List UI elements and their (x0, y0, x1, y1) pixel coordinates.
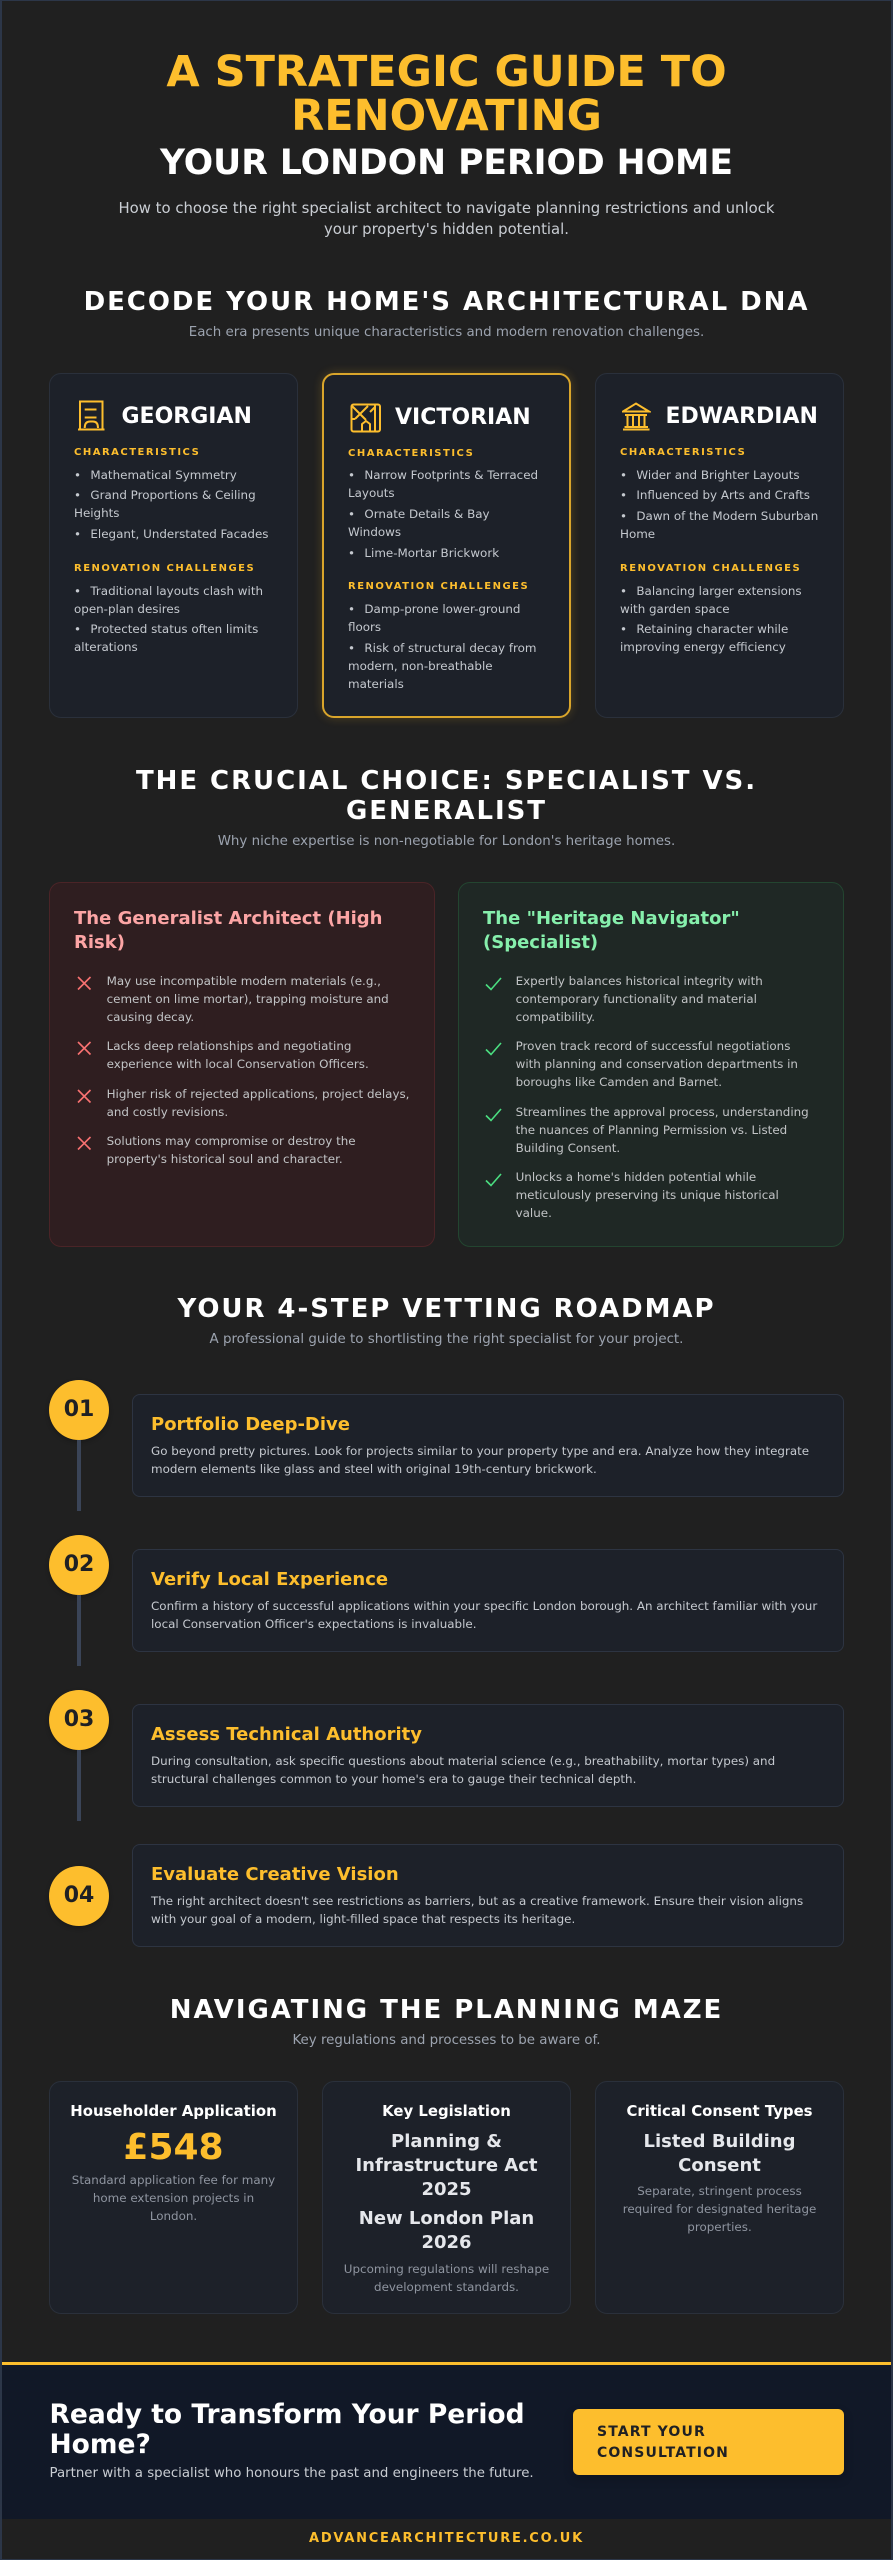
renovation challenges: with garden space (620, 602, 730, 616)
step title: Assess Technical Authority (151, 1724, 422, 1745)
characteristics: Wider and Brighter Layouts (636, 468, 800, 482)
renovation challenges (620, 563, 802, 654)
title: gold lines: A STRATEGIC GUIDE TO (166, 47, 727, 97)
header (118, 47, 774, 238)
heading subtitle: Each era presents unique characteristics and modern renovation challenges. (189, 325, 704, 340)
risk list: Higher risk of rejected applications, project delays, (107, 1087, 409, 1101)
renovation challenges: RENOVATION CHALLENGES (620, 563, 801, 574)
panel: Georgian (49, 373, 298, 718)
panel heading (74, 908, 382, 952)
era name: VICTORIAN (395, 404, 531, 430)
characteristics: Lime-Mortar Brickwork (364, 546, 499, 560)
step number 02 (49, 1535, 109, 1595)
fee description (72, 2173, 275, 2223)
panel: householder application (49, 2081, 298, 2314)
renovation challenges: open-plan desires (74, 602, 180, 616)
panel: generalist architect (49, 882, 435, 1247)
characteristics: Windows (348, 525, 401, 539)
characteristics: CHARACTERISTICS (74, 447, 200, 458)
title: gold lines (166, 47, 727, 141)
subtitle: How to choose the right specialist architect to navigate planning restrictions and unlock (118, 199, 774, 217)
step number 02: 02 (64, 1552, 94, 1577)
characteristics: Layouts (348, 486, 395, 500)
step description: Go beyond pretty pictures. Look for projects similar to your property type and era. Analyze how they integrate (151, 1444, 809, 1458)
card heading: Householder Application (70, 2102, 277, 2120)
icon: Georgian door (78, 400, 104, 430)
panel: Victorian (322, 373, 571, 718)
panel: Edwardian (595, 373, 844, 718)
benefit list: boroughs like Camden and Barnet. (516, 1075, 722, 1089)
step card (132, 1844, 844, 1947)
title: white line: YOUR LONDON PERIOD HOME (160, 143, 733, 183)
heading text: NAVIGATING THE PLANNING MAZE (170, 1995, 723, 2025)
panel: key legislation (322, 2081, 571, 2314)
characteristics: • (620, 509, 627, 523)
connector line (77, 1440, 81, 1511)
characteristics: CHARACTERISTICS (620, 447, 746, 458)
renovation challenges (348, 581, 537, 691)
step number 03: 03 (64, 1707, 94, 1732)
renovation challenges (74, 563, 263, 654)
era name: GEORGIAN (122, 404, 252, 428)
benefit list: contemporary functionality and material (516, 992, 757, 1006)
call to action band (2, 2362, 891, 2519)
connector line (77, 1750, 81, 1821)
heading subtitle: A professional guide to shortlisting the right specialist for your project. (210, 1332, 683, 1347)
heading text: THE CRUCIAL CHOICE: SPECIALIST VS. (136, 766, 757, 796)
renovation challenges: RENOVATION CHALLENGES (74, 563, 255, 574)
panel heading: (Specialist) (483, 932, 598, 952)
benefit list: Expertly balances historical integrity with (516, 974, 763, 988)
section heading: planning maze (170, 1995, 723, 2048)
characteristics: Dawn of the Modern Suburban (636, 509, 818, 523)
risk list: causing decay. (107, 1010, 194, 1024)
characteristics: Heights (74, 506, 120, 520)
step card (132, 1394, 844, 1497)
renovation challenges: floors (348, 620, 381, 634)
plan name: New London Plan (359, 2208, 534, 2229)
step number 01: 01 (64, 1397, 94, 1422)
benefit list: Streamlines the approval process, understanding (516, 1105, 809, 1119)
benefit list: the nuances of Planning Permission vs. Listed (516, 1123, 787, 1137)
characteristics: Grand Proportions & Ceiling (90, 488, 256, 502)
risk list: Solutions may compromise or destroy the (107, 1134, 356, 1148)
fee description: London. (150, 2209, 197, 2223)
step card (132, 1549, 844, 1652)
renovation challenges: improving energy efficiency (620, 640, 786, 654)
title: gold lines: RENOVATING (291, 91, 602, 141)
benefit list: compatibility. (516, 1010, 595, 1024)
characteristics (348, 448, 538, 560)
risk list: cement on lime mortar), trapping moisture and (107, 992, 389, 1006)
panel heading: Risk) (74, 932, 125, 952)
CTA subtext: Partner with a specialist who honours the past and engineers the future. (50, 2466, 534, 2481)
section heading: architectural DNA (84, 287, 809, 340)
renovation challenges: Protected status often limits (90, 622, 258, 636)
step number 03 (49, 1690, 109, 1750)
step 1 (49, 1380, 844, 1511)
risk list: property's historical soul and character. (107, 1152, 343, 1166)
act name (355, 2131, 538, 2200)
renovation challenges: • (620, 622, 627, 636)
characteristics: Narrow Footprints & Terraced (364, 468, 538, 482)
renovation challenges: • (74, 584, 81, 598)
characteristics: • (348, 507, 355, 521)
heading subtitle: Why niche expertise is non-negotiable for London's heritage homes. (218, 834, 675, 849)
step description (151, 1444, 809, 1476)
panel: heritage navigator specialist (458, 882, 844, 1247)
risk list (78, 974, 409, 1166)
risk list: experience with local Conservation Officers. (107, 1057, 369, 1071)
step card (132, 1704, 844, 1807)
CTA heading (50, 2399, 525, 2460)
fee description: home extension projects in (93, 2191, 254, 2205)
consent description (623, 2184, 816, 2234)
risk list: Lacks deep relationships and negotiating (107, 1039, 351, 1053)
characteristics: Ornate Details & Bay (364, 507, 490, 521)
step 4 (49, 1844, 844, 1947)
plan name: 2026 (421, 2232, 472, 2253)
characteristics: • (348, 468, 355, 482)
step title: Verify Local Experience (151, 1569, 388, 1590)
legislation description: Upcoming regulations will reshape (344, 2262, 549, 2276)
renovation challenges: alterations (74, 640, 138, 654)
renovation challenges: materials (348, 677, 404, 691)
renovation challenges: • (348, 602, 355, 616)
step description: with your goal of a modern, light-filled space that respects its heritage. (151, 1912, 575, 1926)
legislation description (344, 2262, 549, 2294)
fee description: Standard application fee for many (72, 2173, 275, 2187)
CTA heading: Ready to Transform Your Period (50, 2399, 525, 2430)
heading subtitle: Key regulations and processes to be aware of. (292, 2033, 601, 2048)
characteristics: CHARACTERISTICS (348, 448, 474, 459)
CTA button (573, 2409, 844, 2475)
renovation challenges: Traditional layouts clash with (90, 584, 263, 598)
characteristics (620, 447, 818, 541)
plan name (359, 2208, 534, 2253)
consent name (644, 2131, 795, 2176)
era name: EDWARDIAN (666, 404, 818, 428)
card heading: Critical Consent Types (626, 2102, 813, 2120)
characteristics: • (74, 527, 81, 541)
step description: structural challenges common to your home's era to gauge their technical depth. (151, 1772, 636, 1786)
characteristics: Elegant, Understated Facades (90, 527, 268, 541)
renovation challenges: • (74, 622, 81, 636)
benefit list (486, 974, 809, 1220)
renovation challenges: Balancing larger extensions (636, 584, 802, 598)
step 2 (49, 1535, 844, 1666)
benefit list: Building Consent. (516, 1141, 620, 1155)
step title: Portfolio Deep-Dive (151, 1414, 350, 1435)
consent description: Separate, stringent process (637, 2184, 802, 2198)
renovation challenges: Damp-prone lower-ground (364, 602, 520, 616)
panel heading (483, 908, 740, 952)
panel: critical consent types (595, 2081, 844, 2314)
renovation challenges: • (620, 584, 627, 598)
characteristics: • (348, 546, 355, 560)
characteristics: Home (620, 527, 655, 541)
heading text: GENERALIST (346, 796, 547, 826)
icon: Edwardian portico (622, 402, 651, 430)
act name: 2025 (421, 2179, 472, 2200)
step description: During consultation, ask specific questions about material science (e.g., breathability, mortar types) and (151, 1754, 775, 1768)
heading text (136, 766, 757, 826)
CTA button: START YOUR (597, 2424, 706, 2440)
benefit list: Proven track record of successful negotiations (516, 1039, 790, 1053)
step description: local Conservation Officer's expectations is invaluable. (151, 1617, 476, 1631)
benefit list: value. (516, 1206, 552, 1220)
step description: modern elements like glass and steel with original 19th-century brickwork. (151, 1462, 597, 1476)
renovation challenges: • (348, 641, 355, 655)
heading text: DECODE YOUR HOME'S ARCHITECTURAL DNA (84, 287, 809, 317)
consent name: Consent (678, 2155, 761, 2176)
consent description: properties. (687, 2220, 752, 2234)
step description: Confirm a history of successful applications within your specific London borough. An architect familiar with your (151, 1599, 817, 1613)
consent description: required for designated heritage (623, 2202, 816, 2216)
card heading: Key Legislation (382, 2102, 511, 2120)
characteristics (74, 447, 268, 541)
step description (151, 1754, 775, 1786)
renovation challenges: Retaining character while (636, 622, 788, 636)
panel heading: The "Heritage Navigator" (483, 908, 740, 928)
step number 04 (49, 1866, 109, 1926)
CTA heading: Home? (50, 2429, 151, 2460)
characteristics: Influenced by Arts and Crafts (636, 488, 810, 502)
legislation description: development standards. (374, 2280, 519, 2294)
step title: Evaluate Creative Vision (151, 1864, 399, 1885)
connector line (77, 1595, 81, 1666)
footer website: ADVANCEARCHITECTURE.CO.UK (309, 2531, 584, 2546)
consent name: Listed Building (644, 2131, 795, 2152)
panel heading: The Generalist Architect (High (74, 908, 382, 928)
step description (150, 1894, 803, 1926)
characteristics: • (620, 468, 627, 482)
renovation challenges: modern, non-breathable (348, 659, 493, 673)
icon: Victorian house window (350, 404, 381, 432)
step description (151, 1599, 818, 1631)
benefit list: with planning and conservation departments in (516, 1057, 798, 1071)
benefit list: meticulously preserving its unique historical (516, 1188, 779, 1202)
characteristics: • (74, 468, 81, 482)
benefit list: Unlocks a home's hidden potential while (516, 1170, 756, 1184)
fee stat: £548 (123, 2127, 224, 2168)
section heading: vetting roadmap (177, 1294, 716, 1347)
characteristics: Mathematical Symmetry (90, 468, 237, 482)
renovation challenges: RENOVATION CHALLENGES (348, 581, 529, 592)
subtitle (118, 199, 774, 238)
characteristics: • (620, 488, 627, 502)
risk list: and costly revisions. (107, 1105, 228, 1119)
renovation challenges: Risk of structural decay from (364, 641, 537, 655)
act name: Planning & (391, 2131, 502, 2152)
step number 01 (49, 1380, 109, 1440)
step 3 (49, 1690, 844, 1821)
heading text: YOUR 4-STEP VETTING ROADMAP (177, 1294, 716, 1324)
section heading: specialist vs generalist (136, 766, 757, 849)
risk list: May use incompatible modern materials (e.g., (107, 974, 381, 988)
subtitle: your property's hidden potential. (324, 220, 569, 238)
characteristics: • (74, 488, 81, 502)
act name: Infrastructure Act (355, 2155, 538, 2176)
step description: The right architect doesn't see restrictions as barriers, but as a creative framework. Ensure their vision aligns (151, 1894, 803, 1908)
CTA button: CONSULTATION (597, 2444, 729, 2460)
step number 04: 04 (64, 1883, 94, 1908)
